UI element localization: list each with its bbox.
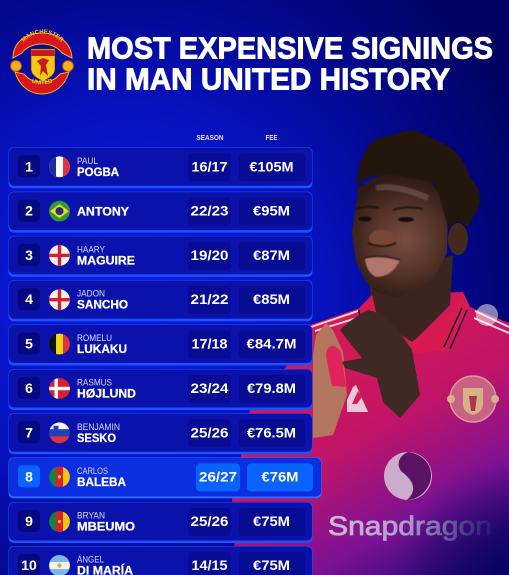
right hand	[340, 310, 420, 418]
row 6: Højlund	[8, 369, 312, 410]
shirt crest	[447, 376, 499, 422]
row 4: Sancho: 4	[25, 291, 33, 307]
row 9: Mbeumo: 9	[25, 513, 33, 529]
face	[352, 172, 448, 298]
row 3: Maguire	[8, 236, 312, 277]
row 3: Maguire: €87M	[253, 247, 290, 263]
Snapdragon logo: Snapdragon	[328, 511, 492, 541]
neck	[370, 255, 453, 345]
row 1: Pogba: 1	[25, 158, 33, 174]
row 1: Pogba: PAUL	[77, 156, 98, 166]
row 6: Højlund: €79.8M	[247, 380, 296, 396]
row 10: Di María	[8, 546, 312, 575]
row 1: Pogba: 16/17	[192, 158, 228, 174]
row 5: Lukaku: €84.7M	[246, 336, 296, 352]
column header: fee: FEE	[266, 133, 278, 142]
row 9: Mbeumo: 25/26	[190, 513, 229, 529]
row 2: Antony: 2	[25, 203, 33, 219]
row 7: Sesko: SESKO	[77, 431, 116, 445]
shirt	[232, 292, 509, 575]
carousel button	[476, 304, 498, 326]
row 2: Antony: ANTONY	[77, 205, 129, 219]
row 8: Baleba (highlighted): 26/27	[199, 468, 237, 484]
row 3: Maguire: 19/20	[190, 247, 229, 263]
collar	[360, 292, 470, 354]
title: MOST EXPENSIVE SIGNINGS	[87, 30, 493, 66]
row 8: Baleba (highlighted): 8	[25, 468, 33, 484]
bottom fade	[394, 460, 509, 575]
title: IN MAN UNITED HISTORY	[87, 62, 450, 96]
row 7: Sesko: BENJAMIN	[77, 422, 120, 432]
row 2: Antony: €95M	[253, 203, 290, 219]
row 6: Højlund: RASMUS	[77, 378, 112, 388]
row 8: Baleba (highlighted): BALEBA	[77, 475, 126, 489]
row 6: Højlund: 6	[25, 380, 33, 396]
row 8: Baleba (highlighted): CARLOS	[77, 466, 108, 476]
row 10: Di María: ÁNGEL	[77, 554, 104, 564]
row 9: Mbeumo: BRYAN	[77, 510, 105, 520]
row 9: Mbeumo: €75M	[253, 513, 290, 529]
row 5: Lukaku: LUKAKU	[77, 342, 127, 356]
row 4: Sancho: SANCHO	[77, 298, 128, 312]
row 5: Lukaku: 17/18	[192, 336, 228, 352]
row 4: Sancho	[8, 280, 312, 321]
row 3: Maguire: MAGUIRE	[77, 253, 135, 267]
row 10: Di María: 10	[21, 557, 37, 573]
row 10: Di María: 14/15	[192, 557, 228, 573]
row 7: Sesko	[8, 413, 312, 454]
Snapdragon logo	[328, 452, 492, 541]
icon: Manchester United crest: UNITED	[32, 78, 52, 84]
row 2: Antony: 22/23	[190, 203, 229, 219]
icon: Manchester United crest: MANCHESTER	[21, 29, 64, 42]
row 10: Di María: €75M	[253, 557, 290, 573]
adidas stripes	[347, 385, 368, 412]
title	[87, 30, 493, 96]
facial features	[356, 187, 428, 277]
row 6: Højlund: 23/24	[190, 380, 229, 396]
left hand	[313, 323, 347, 438]
row 1: Pogba: €105M	[250, 158, 294, 174]
row 5: Lukaku: 5	[25, 336, 33, 352]
player photo	[232, 130, 509, 575]
shirt shoulder stripes	[311, 311, 509, 333]
row 1: Pogba	[8, 147, 312, 188]
row 7: Sesko: 7	[25, 424, 33, 440]
row 2: Antony	[8, 192, 312, 233]
icon: Manchester United crest	[10, 29, 74, 94]
row 6: Højlund: HØJLUND	[77, 386, 136, 400]
row 4: Sancho: €85M	[253, 291, 290, 307]
row 7: Sesko: 25/26	[190, 424, 229, 440]
row 5: Lukaku	[8, 324, 312, 366]
row 1: Pogba: POGBA	[77, 165, 119, 179]
row 5: Lukaku: ROMELU	[77, 333, 112, 343]
row 3: Maguire: HAARY	[77, 244, 105, 254]
row 8: Baleba (highlighted)	[8, 457, 322, 498]
hair	[357, 130, 480, 230]
row 9: Mbeumo: MBEUMO	[77, 520, 135, 534]
row 3: Maguire: 3	[25, 247, 33, 263]
row 4: Sancho: 21/22	[190, 291, 229, 307]
row 4: Sancho: JADON	[77, 289, 105, 299]
column header: season: SEASON	[196, 133, 224, 142]
row 7: Sesko: €76.5M	[247, 424, 296, 440]
row 8: Baleba (highlighted): €76M	[262, 468, 298, 484]
ear	[448, 223, 468, 255]
row 9: Mbeumo	[8, 502, 312, 543]
